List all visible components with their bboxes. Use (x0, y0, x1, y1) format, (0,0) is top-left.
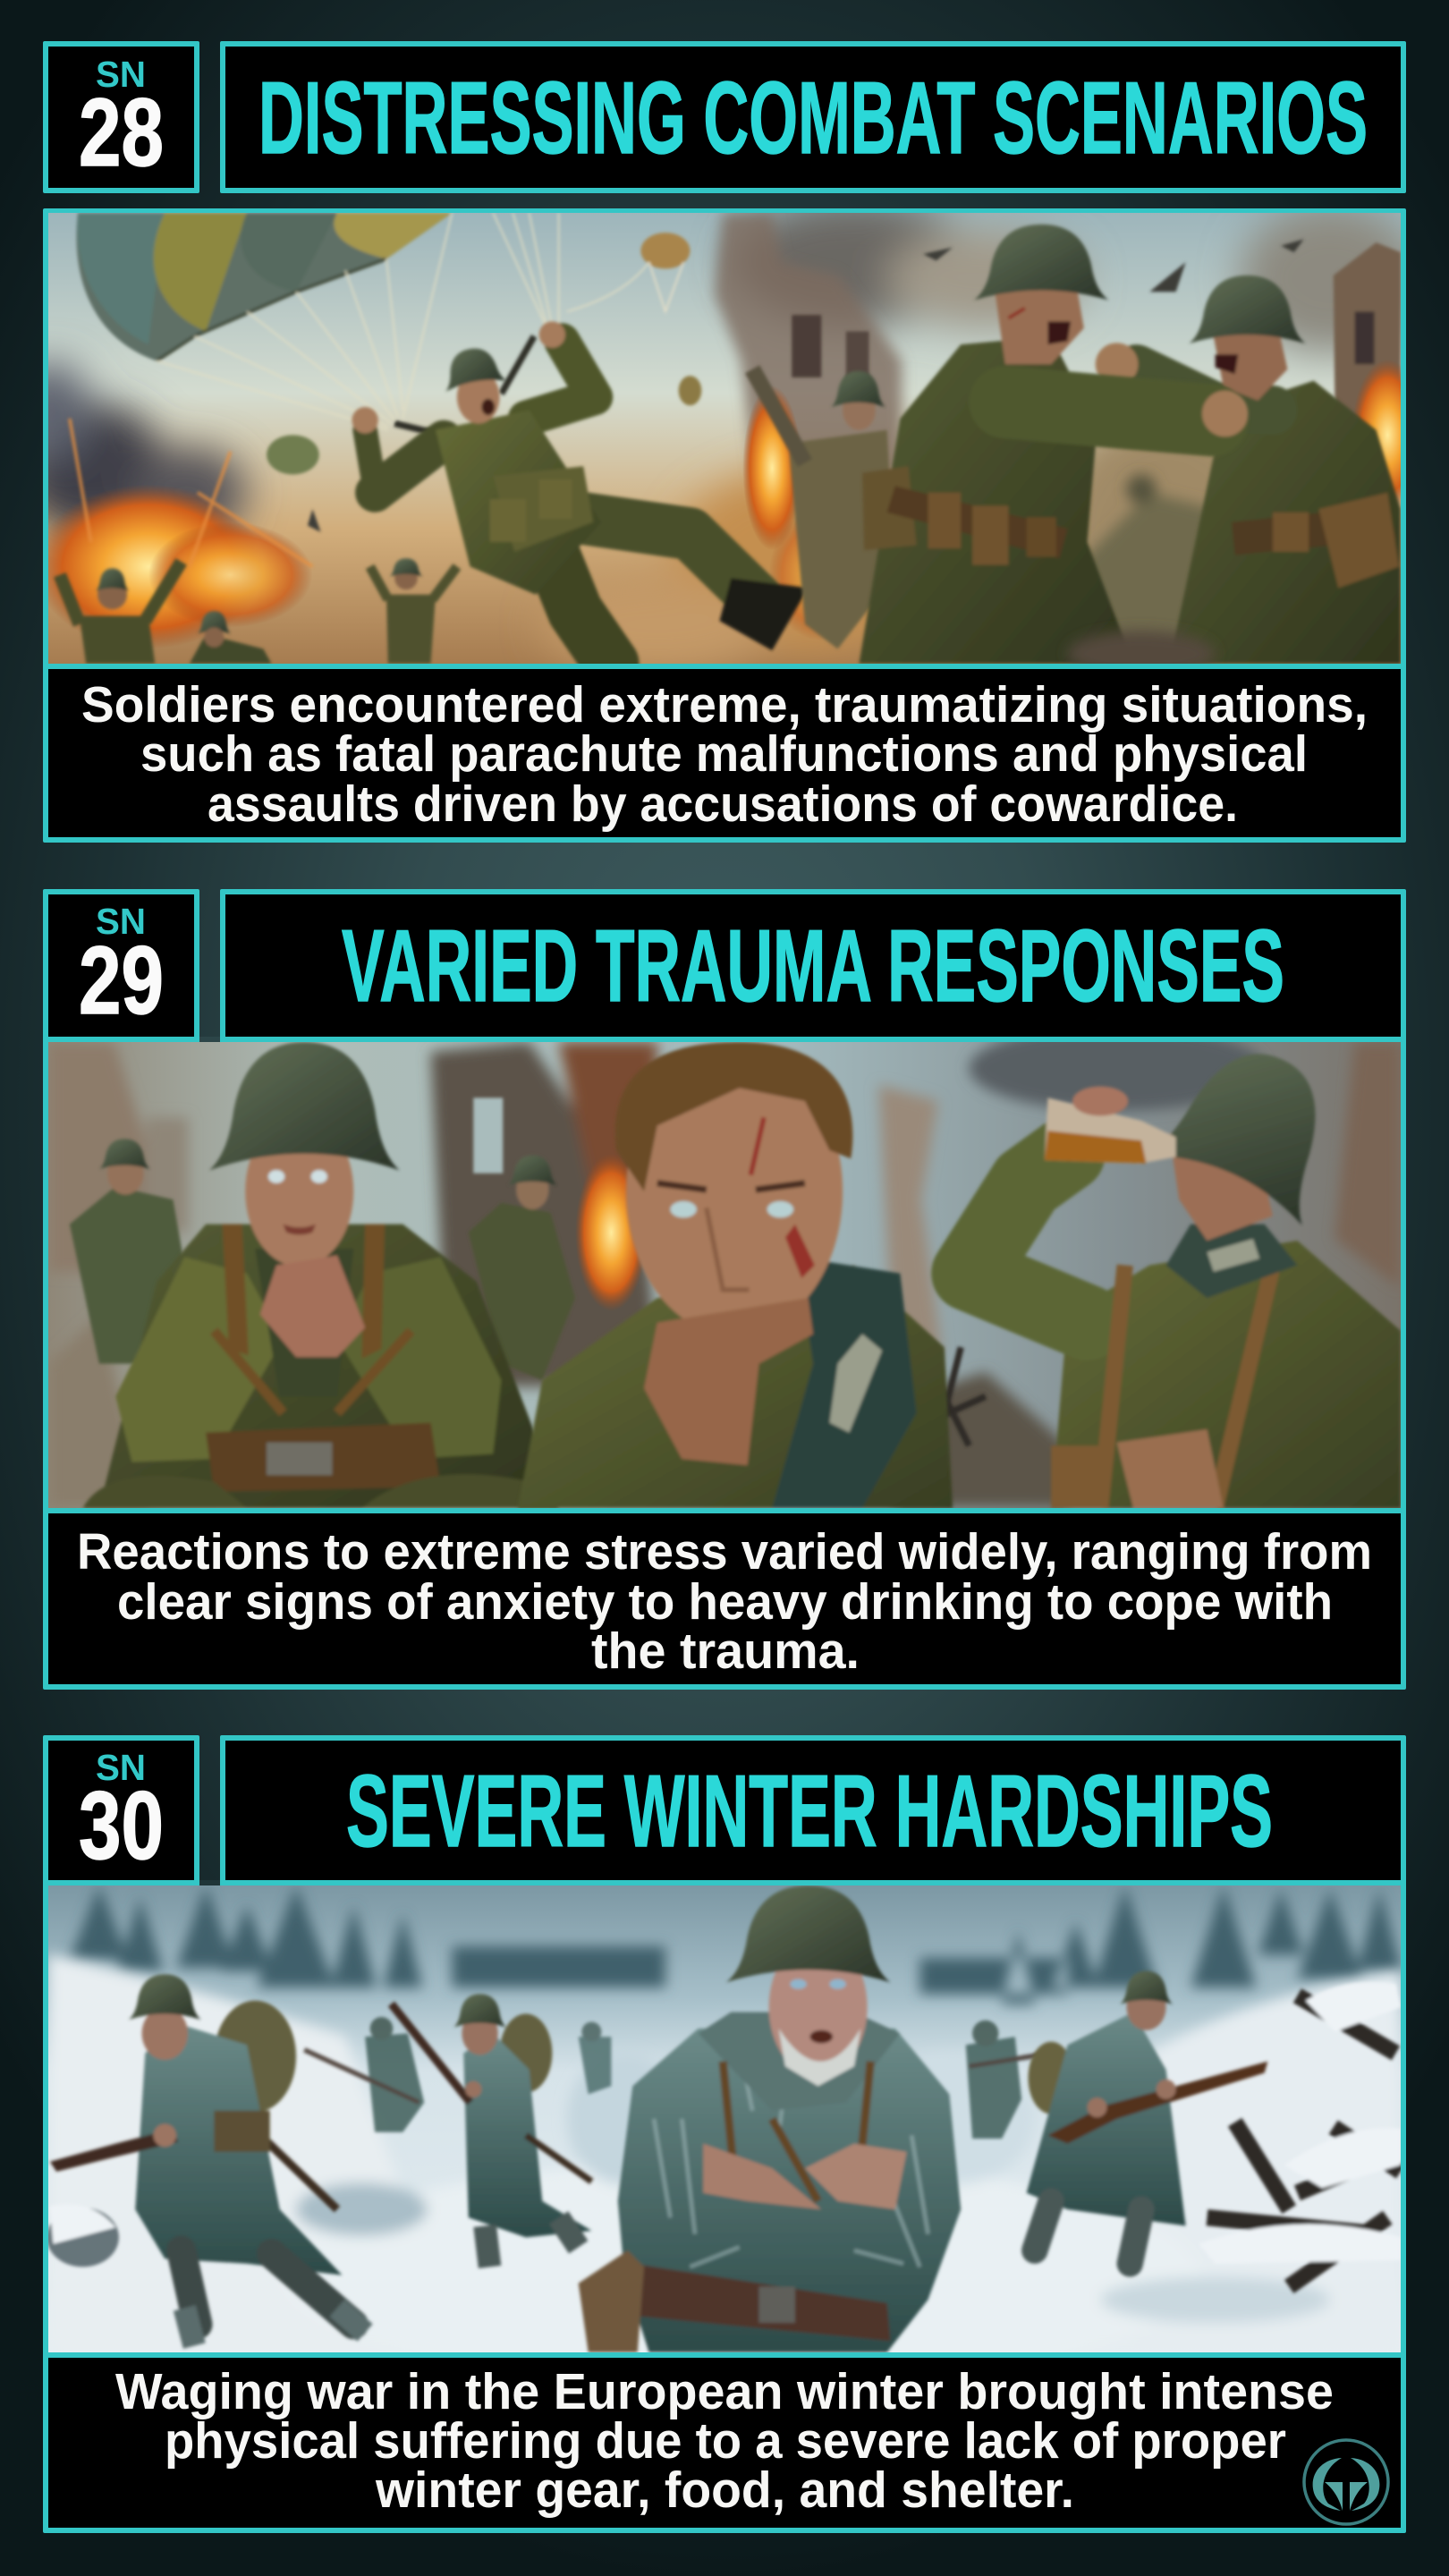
caption: reactions to extreme stress: clear signs of anxiety to heavy drinking to cope with (117, 1573, 1333, 1631)
panel: section 28 distressing combat scenarios (43, 41, 1406, 843)
fallen branches debris (47, 1982, 1401, 2286)
serial number badge 28: SN (96, 54, 146, 95)
anxious soldier with clasped hands (83, 1042, 559, 1508)
fighting soldier right (1096, 275, 1401, 664)
frozen soldier hugging himself (579, 1885, 961, 2352)
illustration: three traumatized soldiers (48, 1042, 1401, 1508)
serial number badge 29 (43, 889, 199, 1042)
caption: waging war in the European winter: Waging war in the European winter brought intense (115, 2363, 1334, 2420)
panel: section 30 severe winter hardships (43, 1735, 1406, 2533)
distant paratroops and debris (267, 233, 1304, 532)
ruins and fire (48, 1026, 1401, 1508)
distant soldiers (304, 2017, 1051, 2139)
serial number badge 28 (43, 41, 199, 193)
caption: waging war in the European winter (43, 1880, 1406, 2533)
parachute canopy (77, 213, 649, 444)
title: varied trauma responses (220, 889, 1406, 1042)
soldier drinking from bottle (969, 1024, 1401, 1508)
illustration: soldiers in snowstorm (48, 1885, 1401, 2352)
left soldiers in blast (60, 558, 457, 664)
gap between badge and title (199, 1880, 220, 1885)
gap between badge and title (199, 1037, 220, 1042)
panel: section 29 varied trauma responses (43, 889, 1406, 1690)
illustration: parachute malfunction and soldiers fighting (48, 213, 1401, 664)
fighting soldier left (859, 225, 1248, 664)
serial number badge 30 (43, 1735, 199, 1885)
serial number badge 29: 29 (79, 926, 164, 1034)
explosions and fires (33, 360, 1424, 648)
snowy treeline (70, 1885, 1402, 2004)
caption: reactions to extreme stress (43, 1037, 1406, 1690)
caption: waging war in the European winter: winter gear, food, and shelter. (375, 2462, 1074, 2519)
soldier advancing with rifle (392, 1994, 591, 2267)
background soldier by ruins (752, 369, 895, 648)
caption: soldiers encountered extreme situations (43, 208, 1406, 843)
rubble (1068, 631, 1216, 677)
caption: reactions to extreme stress: the trauma. (591, 1623, 860, 1680)
snow hills (48, 1954, 1401, 2390)
soldier with rifle left (50, 1974, 365, 2346)
caption: soldiers encountered extreme situations: Soldiers encountered extreme, traumatizing situations, (81, 676, 1368, 733)
caption: reactions to extreme stress: Reactions to extreme stress varied widely, ranging from (77, 1523, 1372, 1580)
falling paratrooper (352, 321, 809, 664)
distant soldier (1076, 474, 1224, 664)
caption: soldiers encountered extreme situations: assaults driven by accusations of cowardice. (208, 775, 1238, 833)
logo watermark (1302, 2438, 1390, 2526)
title: severe winter hardships (220, 1735, 1406, 1885)
serial number badge 30: 30 (79, 1771, 164, 1879)
serial number badge 28: 28 (79, 78, 164, 186)
serial number badge 30: SN (96, 1747, 146, 1788)
soldier with rifle right (1027, 1971, 1267, 2264)
haggard soldier with hand at mouth (518, 1042, 953, 1508)
caption: waging war in the European winter: physical suffering due to a severe lack of proper (165, 2412, 1286, 2470)
caption: soldiers encountered extreme situations: such as fatal parachute malfunctions and physical (140, 725, 1308, 783)
smoke and ruins (9, 199, 1420, 674)
serial number badge 29: SN (96, 901, 146, 942)
background soldiers (70, 1139, 575, 1380)
